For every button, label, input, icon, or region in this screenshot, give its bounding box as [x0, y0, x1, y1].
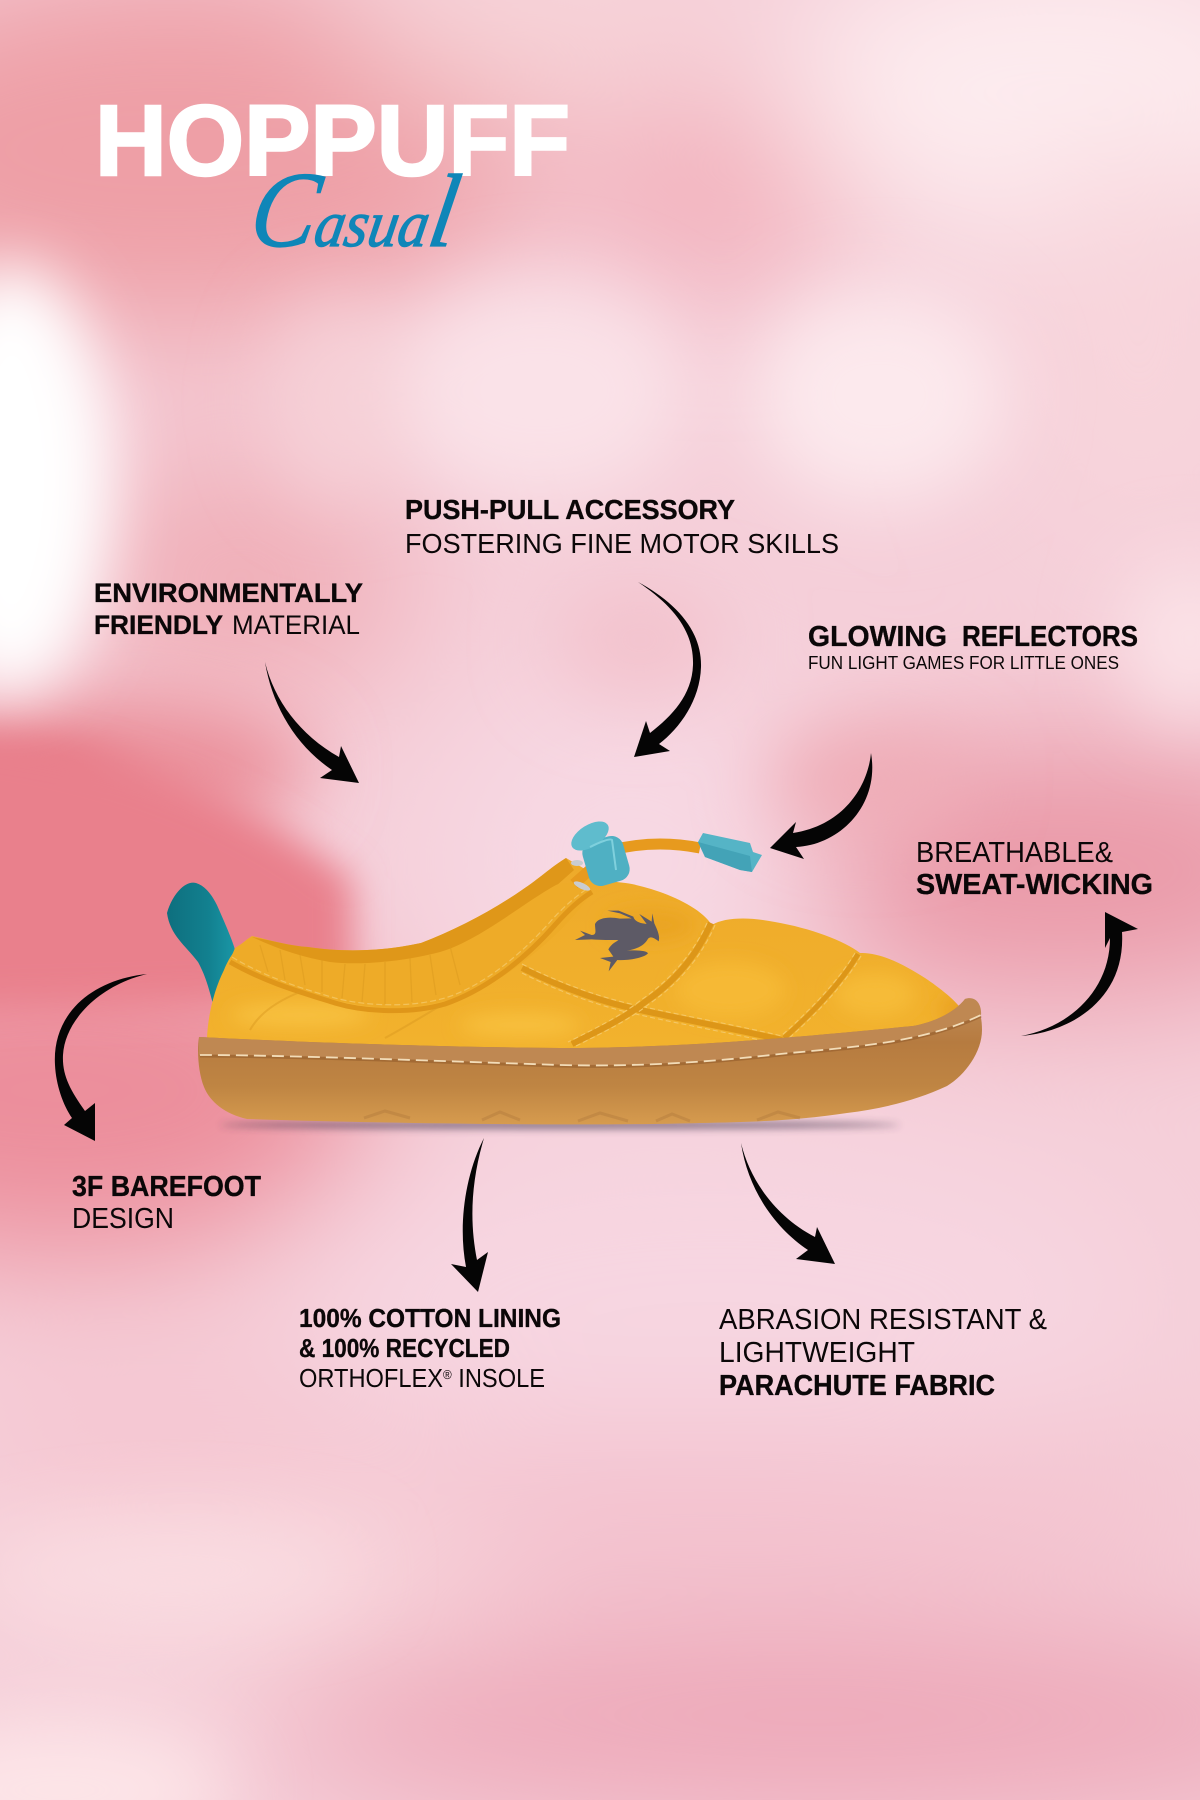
callout: breathable and sweat-wicking: [916, 837, 1153, 901]
callout: push-pull accessory: FOSTERING FINE MOTOR SKILLS: [405, 528, 839, 559]
callout: environmentally friendly material: [94, 578, 363, 640]
fabric creases: [250, 992, 440, 1038]
callout: breathable and sweat-wicking: BREATHABLE&: [916, 837, 1113, 869]
callout: 3F barefoot design: [72, 1171, 261, 1235]
quilting seams: [522, 968, 782, 1040]
shoe illustration: [167, 816, 982, 1129]
callout: glowing reflectors: REFLECTORS: [962, 621, 1138, 653]
callout: glowing reflectors: [808, 621, 1138, 673]
inner elastic band: [252, 858, 574, 964]
sole stitching: [200, 1016, 981, 1066]
shirring folds: [260, 945, 460, 1004]
shoe ground shadow: [220, 1121, 900, 1129]
arrow: environmentally friendly: [265, 662, 359, 783]
callout: environmentally friendly material: FRIENDLY: [94, 610, 223, 640]
callout: parachute fabric: ABRASION RESISTANT &: [719, 1304, 1047, 1336]
arrow: glowing reflectors: [770, 753, 872, 859]
metal eyelets: [571, 860, 591, 893]
arrow: barefoot design: [55, 974, 147, 1141]
callout: glowing reflectors: GLOWING: [808, 621, 947, 653]
icon: frog logo: [575, 911, 659, 971]
icon: teal cord toggle: [566, 816, 633, 889]
arrow: cotton lining: [451, 1138, 488, 1292]
collar seam stitching: [230, 892, 592, 1011]
callout: environmentally friendly material: MATERIAL: [232, 610, 360, 640]
outsole lugs: [364, 1111, 800, 1121]
drawstring cord: [574, 844, 700, 884]
callout: 3F barefoot design: 3F BAREFOOT: [72, 1171, 261, 1203]
arrow: breathable: [1021, 912, 1138, 1036]
soft puffy highlights: [230, 909, 980, 1037]
subtitle: Casual script: Casual: [242, 150, 469, 270]
callout: cotton lining and insole: & 100% RECYCLED: [299, 1333, 510, 1363]
callout: cotton lining and insole: INSOLE: [452, 1363, 545, 1393]
callout: cotton lining and insole: ORTHOFLEX: [299, 1363, 457, 1393]
callout: cotton lining and insole: 100% COTTON LINING: [299, 1303, 561, 1333]
callout: push-pull accessory: [405, 494, 839, 559]
arrow: push-pull accessory: [634, 582, 701, 757]
callout: glowing reflectors: FUN LIGHT GAMES FOR LITTLE ONES: [808, 653, 1119, 673]
arrow: parachute fabric: [741, 1143, 835, 1264]
sole rim band: [199, 998, 981, 1065]
callout: 3F barefoot design: DESIGN: [72, 1203, 174, 1235]
shirred collar panel: [230, 883, 592, 1008]
icon: teal cord end: [698, 833, 762, 872]
shoe upper: [207, 858, 980, 1051]
callout: cotton lining and insole: [299, 1303, 561, 1393]
title: HOPPUFF: HOPPUFF: [95, 85, 570, 197]
rubber sole: [198, 998, 982, 1124]
callout: parachute fabric: LIGHTWEIGHT: [719, 1337, 915, 1369]
red panel with soft right edge: [0, 730, 352, 1010]
callout: cotton lining and insole: ®: [443, 1367, 452, 1382]
callout: parachute fabric: PARACHUTE FABRIC: [719, 1370, 995, 1402]
callout: breathable and sweat-wicking: SWEAT-WICKING: [916, 869, 1153, 901]
callout: environmentally friendly material: ENVIRONMENTALLY: [94, 578, 363, 608]
callout: push-pull accessory: PUSH-PULL ACCESSORY: [405, 494, 735, 525]
callout: parachute fabric: [719, 1304, 1047, 1402]
icon: teal pull tab: [167, 883, 235, 1004]
